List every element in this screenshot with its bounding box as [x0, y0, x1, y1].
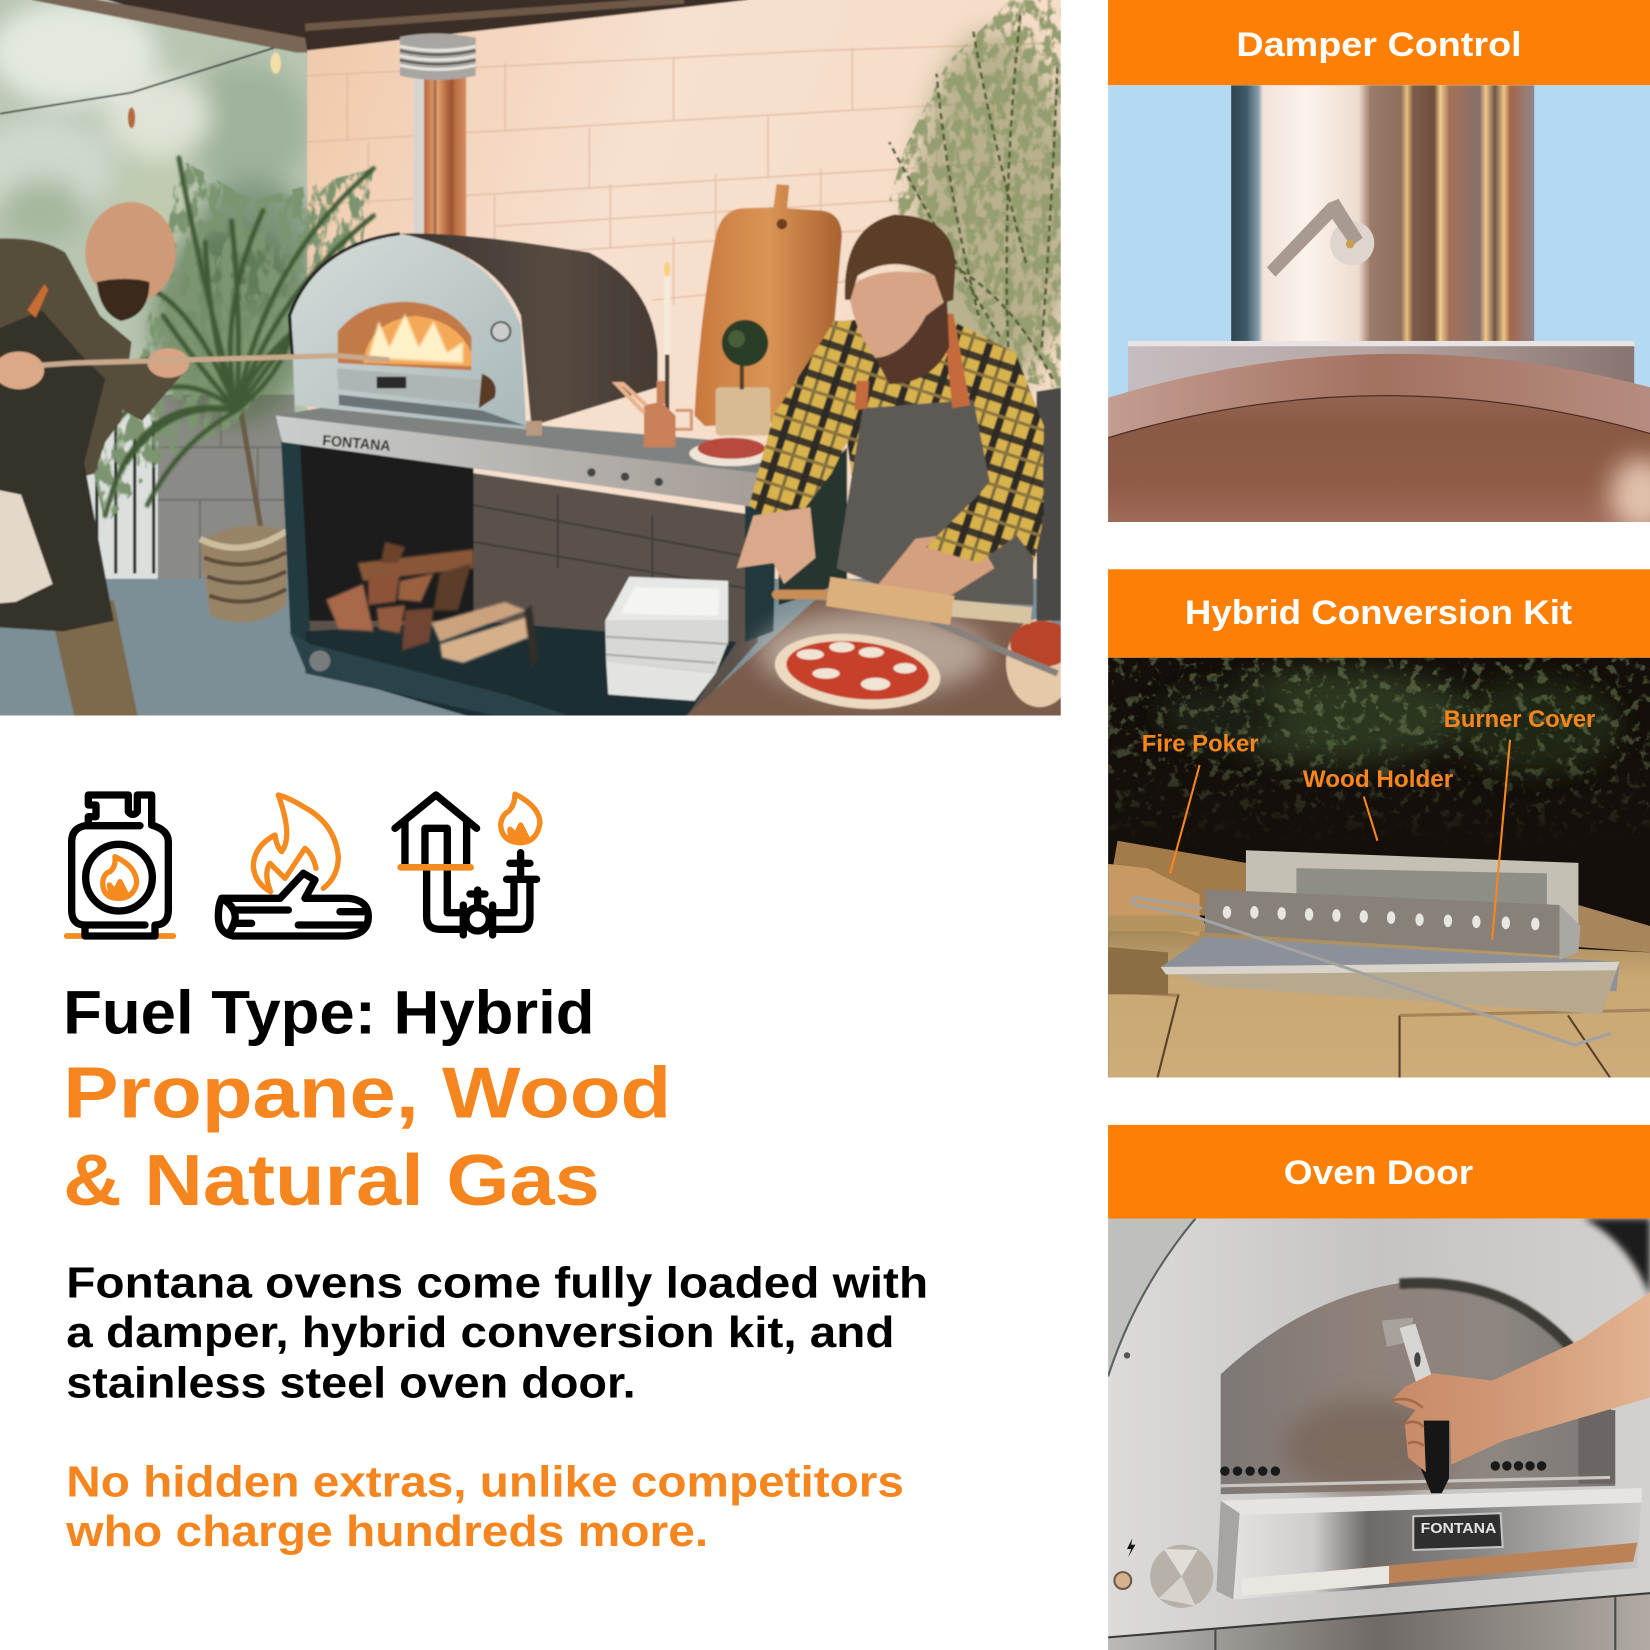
photo: conversion kit on wooden boards: [1108, 658, 1650, 1078]
banner: damper control: [1108, 0, 1650, 85]
photo: lower wall and floor: [0, 395, 1084, 737]
apron: [837, 400, 1033, 605]
photo: cart body: [281, 437, 777, 737]
apron straps: [854, 314, 970, 410]
photo: dark cabinet behind right man: [779, 447, 847, 605]
towel: [0, 486, 53, 605]
heading: fuel list: Propane, Wood: [63, 1053, 671, 1134]
arm and hand: [1391, 1292, 1650, 1472]
photo: chimney: [400, 33, 476, 239]
panel: hybrid conversion kit: [1108, 569, 1650, 1078]
banner: damper control: Damper Control: [1236, 26, 1522, 64]
photo: brick wall: [307, 0, 1086, 610]
door badge: [1413, 1513, 1503, 1550]
rolling pin: [777, 591, 1031, 616]
banner: hybrid conversion kit: [1108, 569, 1650, 658]
photo: firewood: [326, 542, 539, 668]
photo: right man in plaid: [737, 215, 1044, 616]
photo: window and foliage backdrop: [0, 0, 316, 442]
heading: fuel type: Fuel Type: Hybrid: [63, 978, 595, 1046]
photo: oven dome: [289, 233, 658, 436]
text block: description: [66, 1259, 928, 1407]
icon: propane tank: [67, 795, 173, 936]
photo: candle: [664, 262, 670, 418]
panel: oven door: [1108, 1125, 1650, 1650]
damper lever: [1267, 199, 1374, 277]
photo: hand opening oven door: [1108, 1219, 1650, 1650]
text block: description: a damper, hybrid conversion kit, and: [66, 1309, 894, 1357]
oven door tray: [1216, 1488, 1642, 1599]
label: burner cover: [1444, 707, 1595, 940]
fire poker rod: [1131, 898, 1611, 1045]
photo: potted topiary: [716, 320, 770, 436]
photo: wooden table with flour: [685, 599, 1061, 716]
text block: description: stainless steel oven door.: [66, 1359, 636, 1407]
wood planks: [1108, 926, 1650, 1078]
handle: [1421, 1389, 1449, 1493]
photo: pizza: [774, 633, 942, 710]
dome corners: [1108, 1219, 1195, 1376]
photo: potted palm plant: [84, 147, 389, 623]
photo: right dark edge: [1035, 386, 1061, 622]
photo: pizza peel pole: [42, 356, 389, 365]
head: [850, 271, 943, 360]
control knob: [1114, 1538, 1213, 1608]
photo: woven basket planter: [200, 525, 286, 623]
head and beard: [85, 202, 176, 303]
oven mouth with flames: [338, 302, 471, 370]
text block: no hidden extras callout: [65, 1458, 904, 1556]
hero photo: pizza oven outdoor kitchen: [0, 0, 1086, 737]
trousers: [54, 600, 138, 716]
firewood logs: [1108, 841, 1246, 915]
heading: fuel list: & Natural Gas: [63, 1140, 600, 1221]
photo: copper kettle: [617, 381, 691, 447]
banner: oven door: Oven Door: [1284, 1154, 1473, 1192]
photo: left man with peel: [0, 202, 189, 737]
photo: bowl: [931, 619, 1073, 707]
arms and hands: [878, 535, 996, 596]
photo: damper on flue: [1108, 85, 1650, 531]
wood holder front with flame cutouts: [1205, 889, 1581, 960]
text block: no hidden extras callout: No hidden extras, unlike competitors: [66, 1458, 904, 1506]
photo: plate of meat: [689, 438, 773, 466]
icon: wood log with flame: [218, 795, 368, 936]
banner: hybrid conversion kit: Hybrid Conversion Kit: [1185, 594, 1573, 632]
apron: [0, 310, 114, 631]
flue base plate: [1128, 341, 1634, 421]
copper dome: [1108, 354, 1650, 522]
label: fire poker: [1142, 731, 1259, 873]
label: wood holder: [1303, 767, 1453, 841]
oven lower panels: [1108, 1593, 1650, 1650]
door hinge bracket: [1382, 1317, 1413, 1347]
heading: fuel list: [63, 1053, 671, 1221]
banner: oven door: [1108, 1125, 1650, 1219]
counter logo text: FONTANA: [322, 433, 392, 455]
photo: olive tree: [888, 0, 1061, 390]
label: wood holder: Wood Holder: [1303, 767, 1453, 793]
fuel type icons row: [67, 794, 540, 936]
photo: stainless counter: [275, 407, 762, 508]
text block: no hidden extras callout: who charge hundreds more.: [65, 1508, 708, 1556]
text block: description: Fontana ovens come fully loaded with: [66, 1259, 928, 1307]
icon: natural gas line to house: [395, 794, 540, 935]
label: fire poker: Fire Poker: [1142, 731, 1259, 757]
tray: burner cover: [1161, 937, 1619, 1014]
panel: damper control: [1108, 0, 1650, 531]
shirt: [0, 238, 132, 505]
label: burner cover: Burner Cover: [1444, 707, 1595, 733]
wood holder back: [1246, 850, 1578, 932]
photo: cutting board: [695, 184, 842, 426]
arms: [121, 356, 182, 422]
photo: white dough trays: [605, 577, 728, 701]
oven opening arch: [1220, 1280, 1615, 1494]
door badge: FONTANA: [1421, 1521, 1497, 1537]
flue pipe: [1231, 85, 1534, 343]
photo: ceiling beam: [32, 0, 758, 53]
